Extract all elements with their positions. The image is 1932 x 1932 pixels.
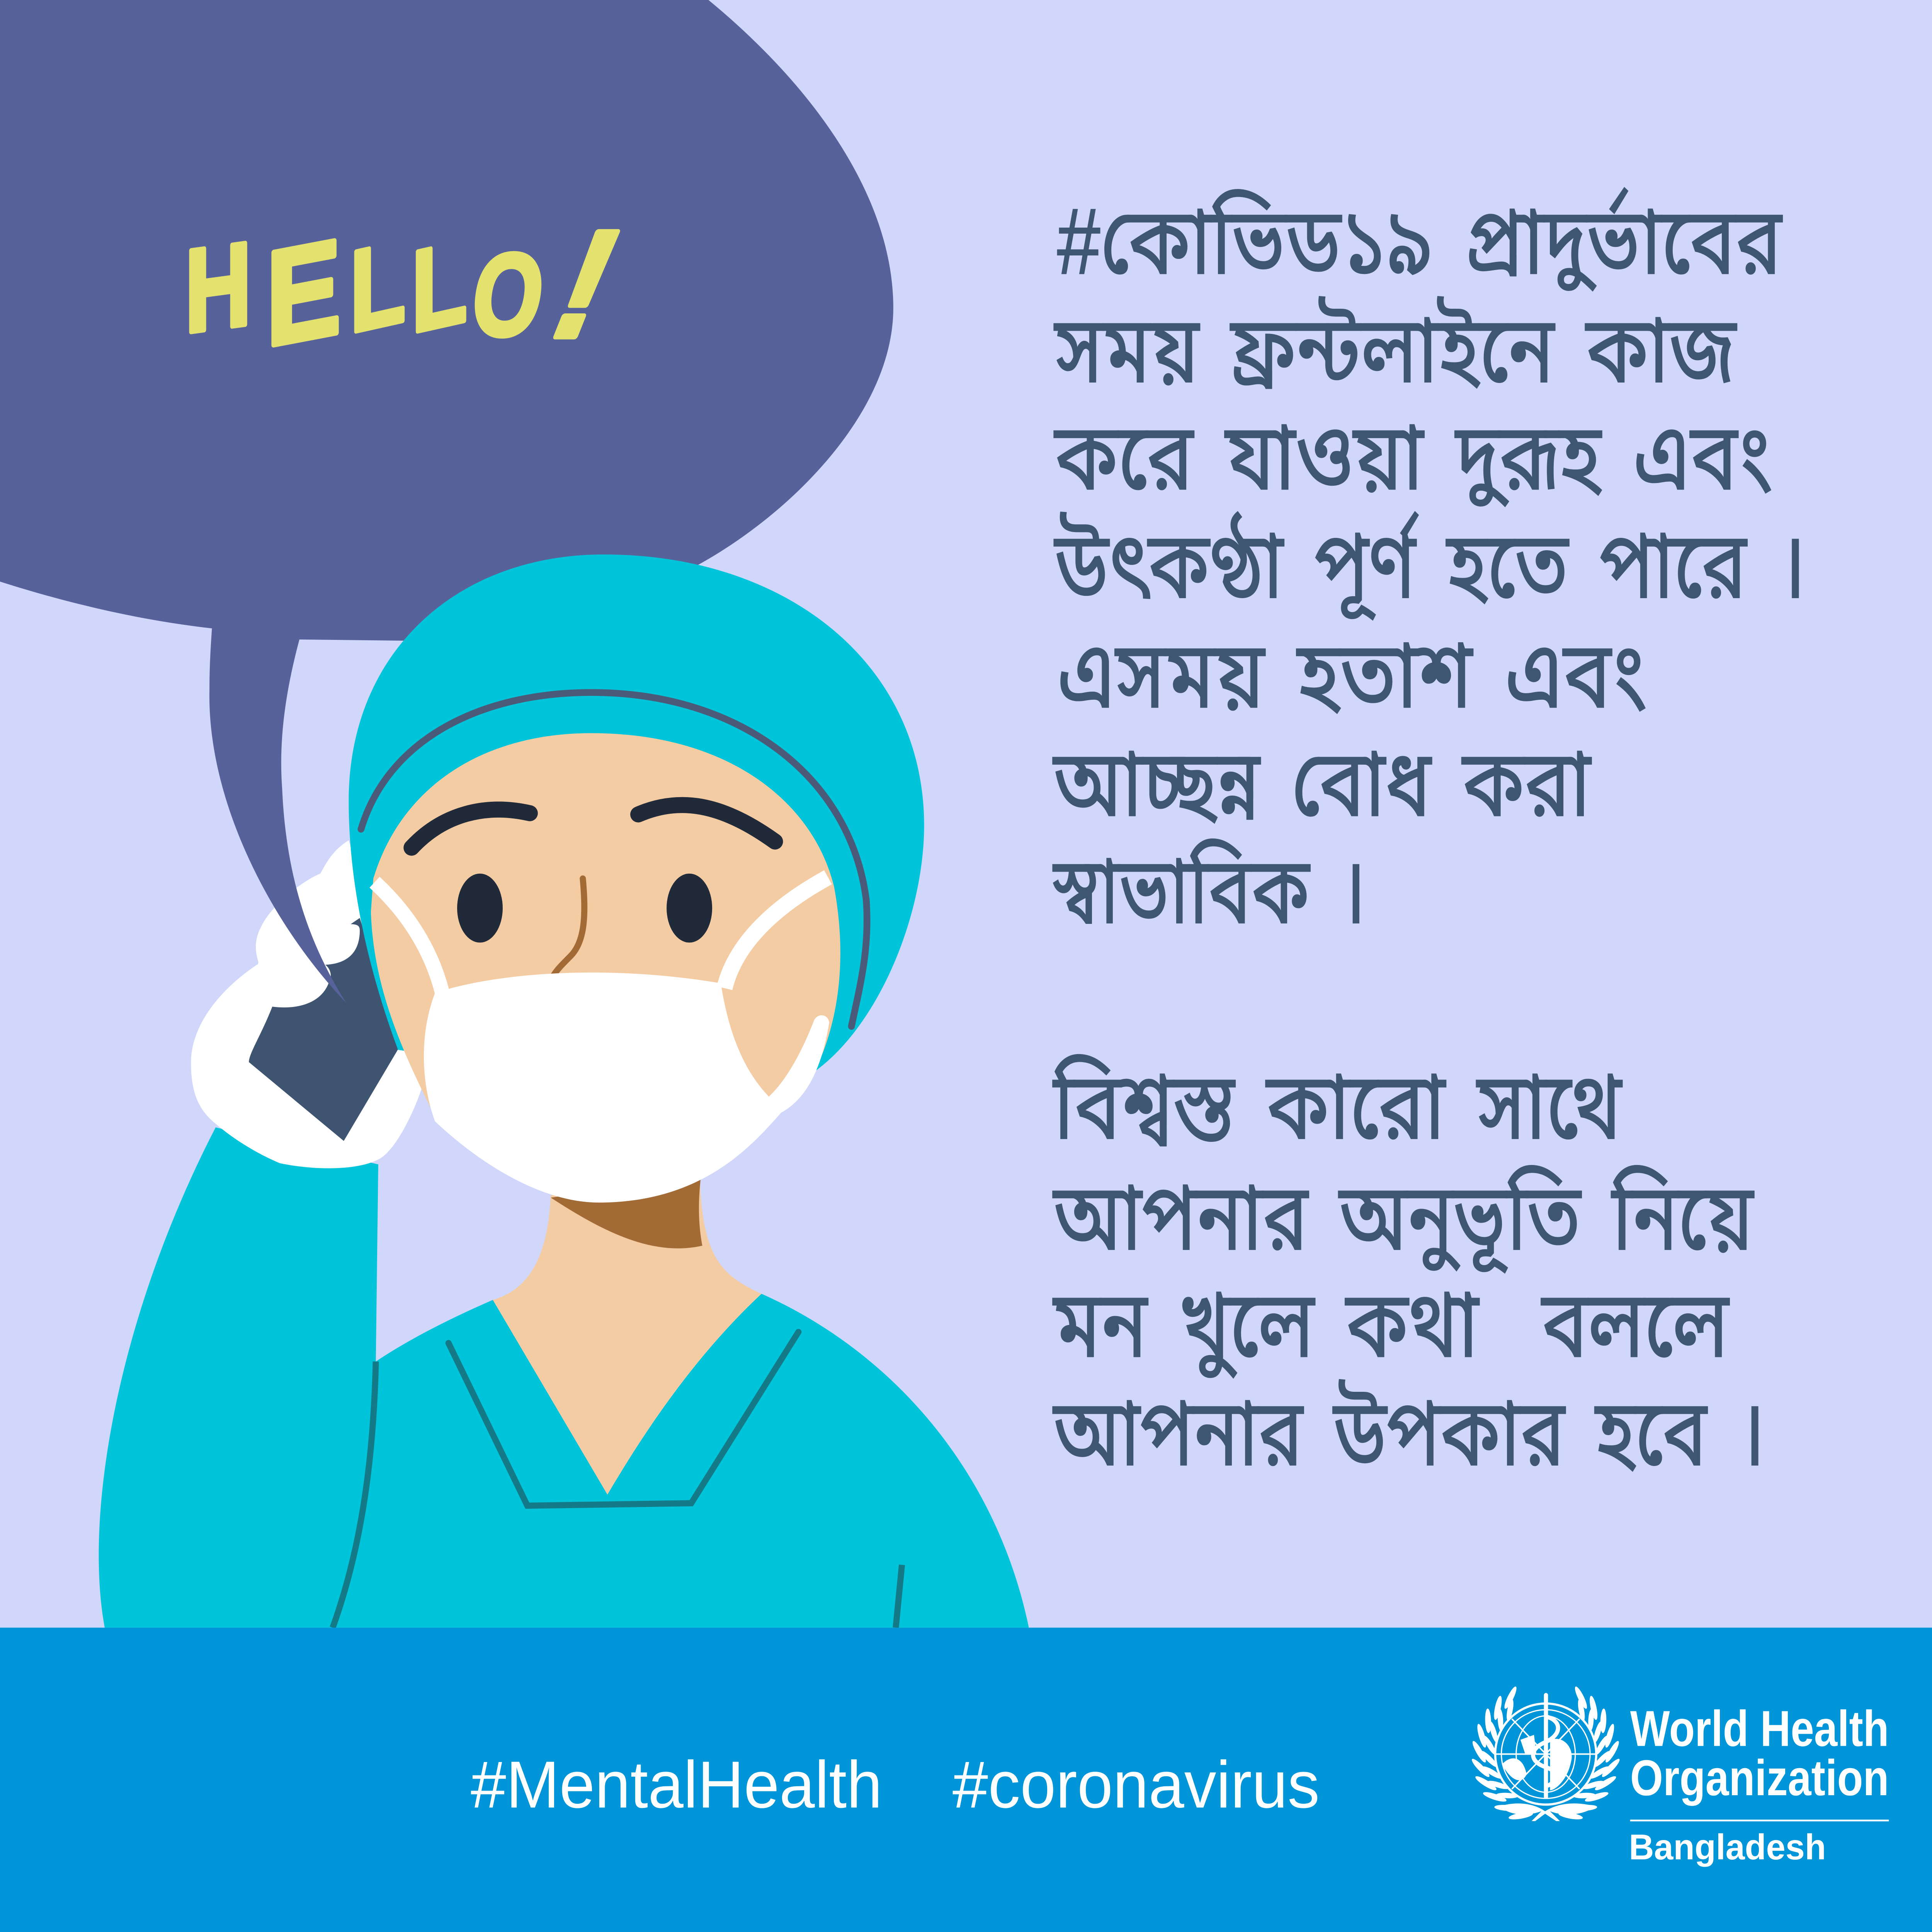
hello speech text [185,200,643,375]
WHO wordmark: World Health [1630,1700,1889,1757]
sleeve seam [333,1362,376,1628]
footer band [0,1628,1932,1932]
paragraph two: বিশ্বস্ত কারো সাথে [1053,1054,1622,1158]
paragraph one: আচ্ছন্ন বোধ করা [1053,731,1592,836]
left mask strap [374,882,442,993]
paragraph one: সময় ফ্রন্টলাইনে কাজ [1054,297,1737,402]
hello speech text: L [350,215,406,357]
paragraph one: স্বাভাবিক । [1053,838,1366,943]
hashtags [471,1748,1320,1822]
paragraph one: #কোভিড১৯ প্রাদুর্ভাবের [1057,187,1782,294]
hashtags: #MentalHealth [471,1748,882,1822]
face mask [424,973,829,1202]
neck [493,1177,762,1495]
side seam [896,1565,902,1628]
scrub collar [449,1332,798,1506]
character: health worker [0,0,1029,1628]
paragraph two: মন খুলে কথা বললে [1053,1272,1730,1378]
speech bubble [0,0,893,1003]
neck shadow [551,1175,702,1248]
hello speech text: ! [531,200,643,369]
cap band [361,692,867,1026]
bengali message [1053,187,1806,1485]
paragraph one: এসময় হতাশ এবং [1057,623,1646,727]
WHO emblem [1470,1685,1621,1821]
nose [553,879,584,976]
face [371,733,840,1109]
hello speech text: O [465,230,551,360]
surgical cap [349,554,924,1084]
WHO logo [1470,1685,1889,1867]
glove fingers [253,850,360,1007]
WHO wordmark: Organization [1630,1750,1889,1806]
hashtags: #coronavirus [952,1748,1320,1822]
WHO wordmark: Bangladesh [1629,1827,1826,1867]
WHO wordmark [1629,1700,1889,1867]
wreath [1470,1685,1621,1821]
hello speech text: E [266,211,341,375]
paragraph two: আপনার উপকার হবে । [1053,1379,1766,1485]
paragraph two [1053,1054,1766,1485]
white glove [191,840,422,1168]
paragraph one: করে যাওয়া দুরূহ এবং [1054,405,1772,509]
paragraph one [1053,187,1806,943]
right mask strap [724,877,828,988]
eyes [457,874,712,942]
paragraph two: আপনার অনুভূতি নিয়ে [1053,1165,1754,1273]
hello speech text: H [185,217,252,358]
eyebrows [412,805,775,848]
hello speech text: L [412,215,467,357]
phone [249,918,399,1141]
scrubs body and raised arm [99,1128,1029,1628]
